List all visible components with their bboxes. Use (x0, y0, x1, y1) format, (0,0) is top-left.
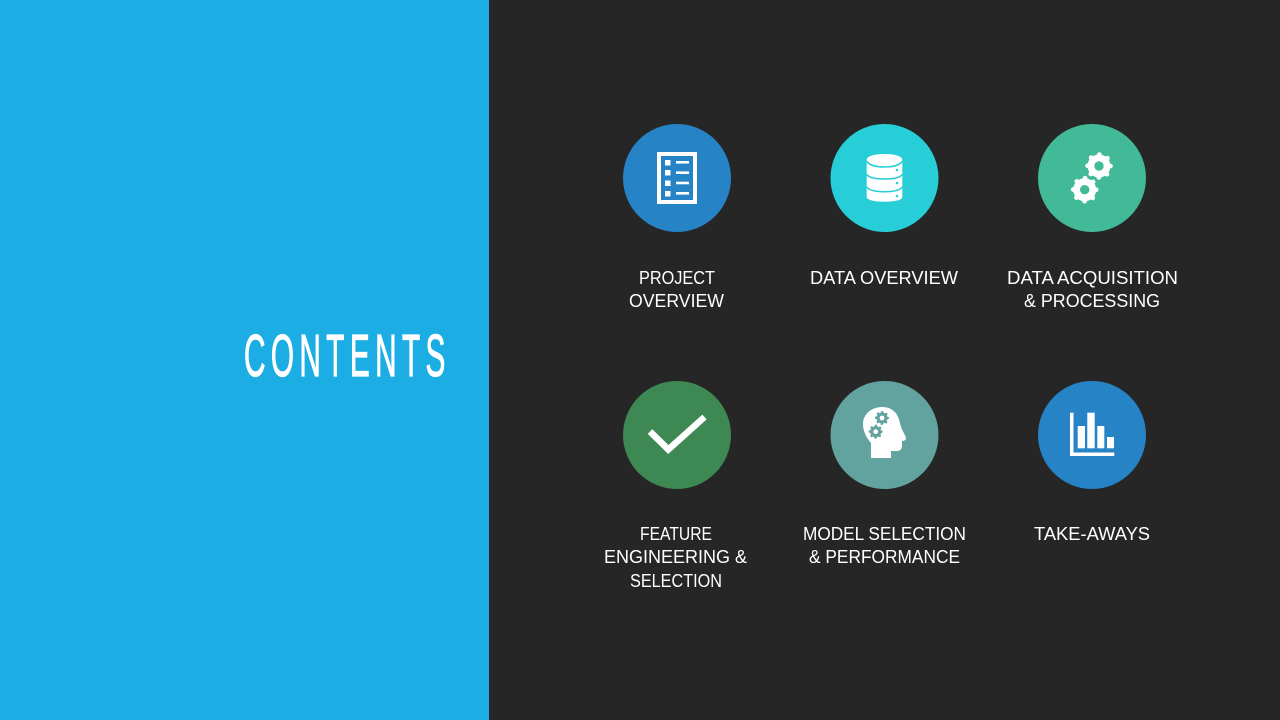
label: data acquisition and processing (1007, 268, 1178, 311)
label: data acquisition and processing: & PROCESSING (1024, 291, 1160, 311)
panel: left blue background (0, 0, 489, 720)
icon: gears (1038, 124, 1146, 232)
item: data overview (810, 124, 958, 288)
label: feature engineering and selection (604, 524, 747, 591)
label: model selection and performance (803, 524, 966, 567)
icon: head with gears (830, 381, 938, 489)
item: take-aways (1034, 381, 1150, 544)
label: project overview: PROJECT (639, 268, 715, 288)
item: feature engineering and selection (604, 381, 747, 591)
label: feature engineering and selection: SELECTION (630, 571, 722, 591)
label: data acquisition and processing: DATA ACQUISITION (1007, 268, 1178, 288)
label: project overview (629, 268, 724, 311)
panel: right dark background (489, 0, 1280, 720)
label: feature engineering and selection: FEATURE (640, 524, 712, 544)
label: model selection and performance: MODEL SELECTION (803, 524, 966, 544)
icon: document list (623, 124, 731, 232)
icon: database (830, 124, 938, 232)
title: CONTENTS (244, 322, 451, 389)
label: model selection and performance: & PERFORMANCE (809, 547, 960, 567)
item: data acquisition and processing (1007, 124, 1178, 311)
label: feature engineering and selection: ENGINEERING & (604, 547, 747, 567)
label: project overview: OVERVIEW (629, 291, 724, 311)
item: model selection and performance (803, 381, 966, 567)
label: take-aways: TAKE-AWAYS (1034, 524, 1150, 544)
icon: bar chart (1038, 381, 1146, 489)
label: data overview: DATA OVERVIEW (810, 268, 958, 288)
icon: check mark (623, 381, 731, 489)
item: project overview (623, 124, 731, 311)
